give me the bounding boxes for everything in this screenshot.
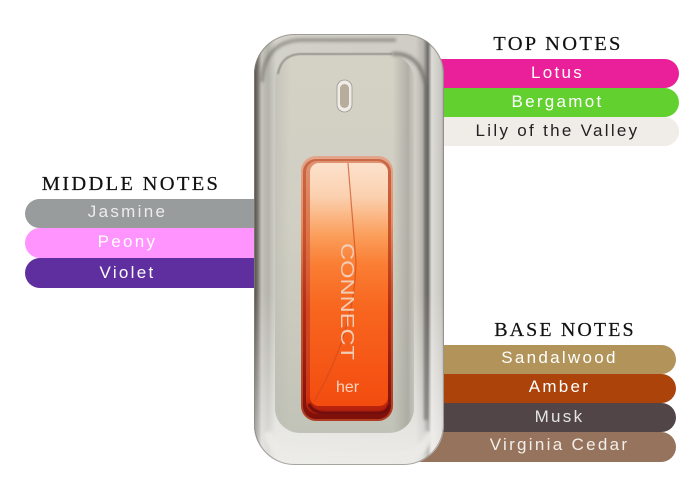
note: Jasmine: Jasmine [88, 202, 167, 221]
note: Amber [400, 374, 676, 403]
note: Sandalwood [400, 345, 676, 374]
note: Bergamot [420, 88, 679, 117]
note: Peony: Peony [98, 232, 157, 251]
heading: middle notes: MIDDLE NOTES [42, 173, 220, 195]
panel: base notes bars [420, 345, 676, 462]
note: Musk: Musk [535, 407, 584, 426]
note: Amber: Amber [529, 377, 590, 396]
icon: bottle body [254, 34, 444, 465]
note: Musk [400, 403, 676, 432]
note: Peony [25, 228, 265, 258]
heading: top notes: TOP NOTES [493, 33, 623, 55]
bottle label: her: her [336, 379, 360, 396]
panel: middle notes bars [25, 199, 254, 288]
note: Lily of the Valley: Lily of the Valley [476, 121, 639, 140]
note: Virginia Cedar [400, 432, 676, 462]
heading: base notes: BASE NOTES [494, 319, 636, 341]
note: Lotus: Lotus [531, 63, 584, 82]
icon: liquid window [301, 156, 393, 421]
note: Virginia Cedar: Virginia Cedar [490, 435, 629, 454]
note: Bergamot: Bergamot [511, 92, 604, 111]
panel: top notes bars [441, 59, 679, 146]
note: Lotus [420, 59, 679, 88]
note: Lily of the Valley [420, 117, 679, 146]
note: Violet: Violet [99, 263, 156, 282]
note: Violet [25, 258, 265, 288]
note: Sandalwood: Sandalwood [501, 348, 618, 367]
icon: spray button [337, 80, 352, 112]
note: Jasmine [25, 199, 265, 228]
bottle name: CONNECT: CONNECT [337, 243, 357, 360]
